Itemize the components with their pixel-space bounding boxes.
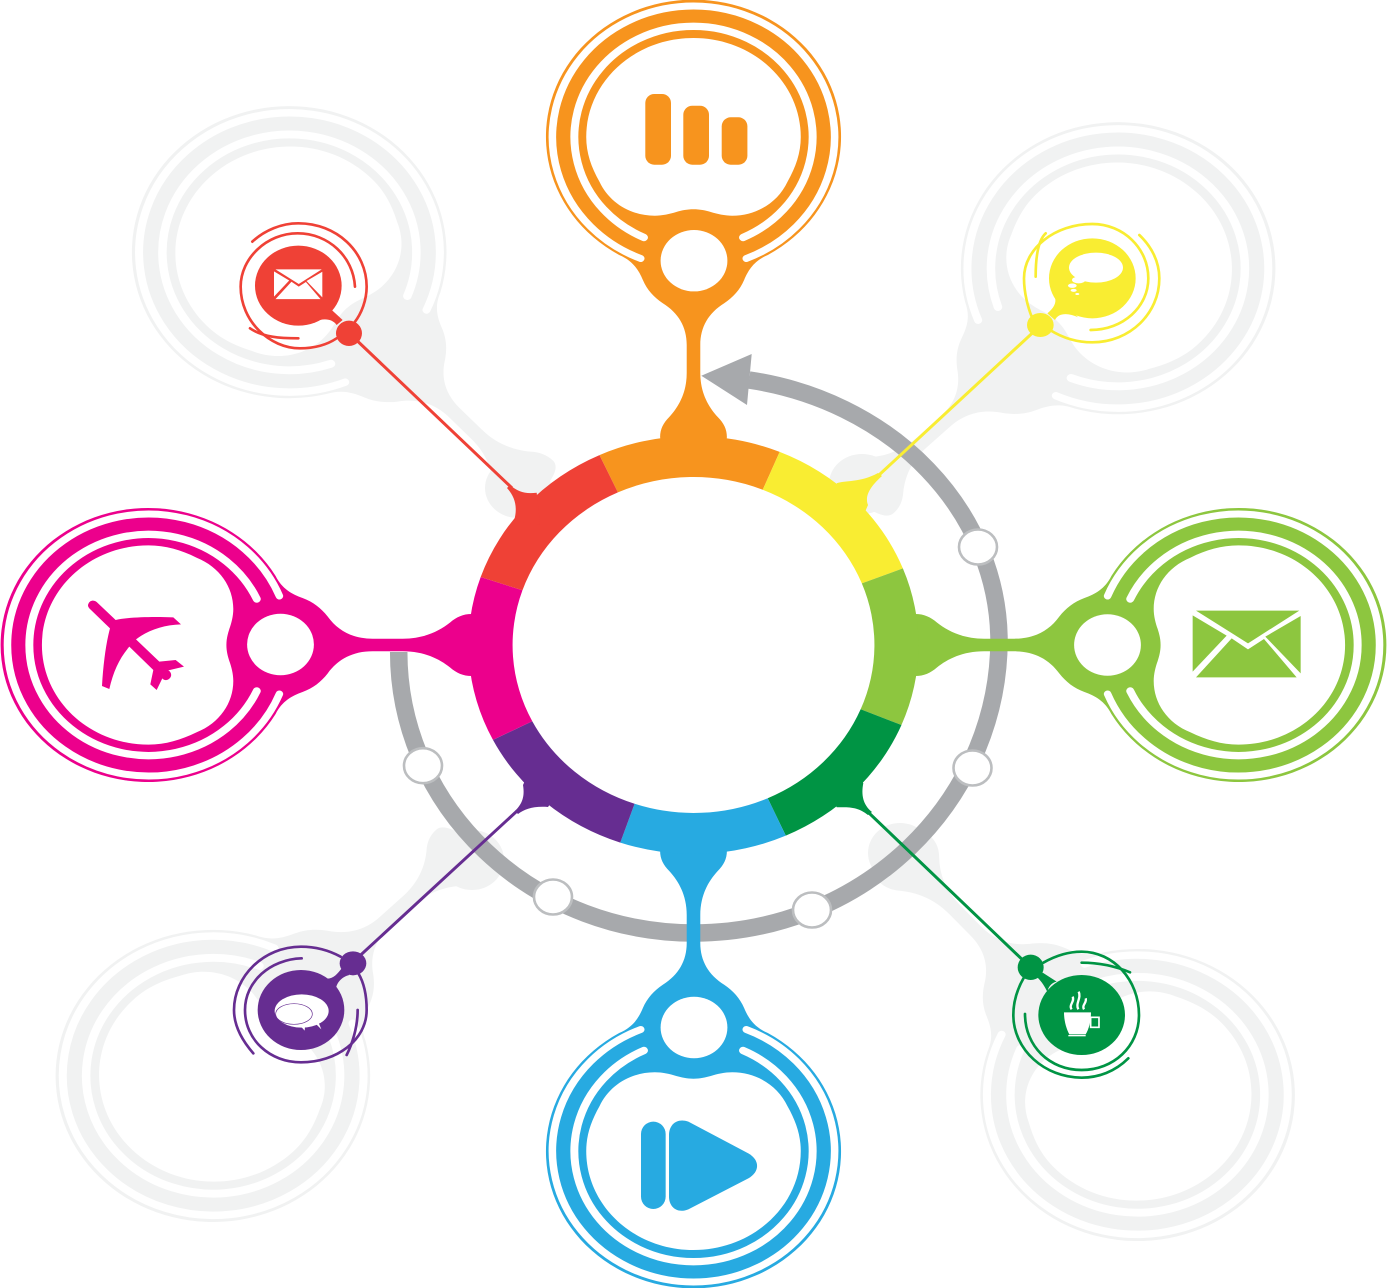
small bubble: purple conversation [234,770,560,1062]
ghost foot blobs [440,454,932,890]
ring segment: light green [861,568,919,725]
icon group: yellow chat bubble [1024,224,1159,342]
connector: purple [352,770,560,963]
icon: speech bubble [1068,253,1123,295]
icon group: purple conversation bubble [234,947,367,1062]
connector: red [349,333,540,525]
balloon: green envelope [901,508,1386,782]
ring segment: magenta [468,577,532,740]
balloon: magenta airplane [1,508,486,782]
icon: coffee cup [1064,992,1099,1036]
ghost balloon: upper left [67,46,652,595]
icon: conversation [275,994,329,1031]
ghost balloon: lower left [0,738,581,1282]
connector: dark green [830,770,1030,967]
ring segment: orange [599,436,780,492]
arrow nodes [404,530,997,928]
icon: bar chart [645,94,747,165]
icon group: green coffee bubble [1013,952,1139,1078]
small bubble: green coffee [830,770,1139,1078]
small bubble: red mail [241,223,540,525]
ring segment: purple [493,721,635,843]
icon: envelope [274,269,322,299]
balloon: orange bar chart [546,0,841,450]
small bubble: yellow chat [837,224,1159,512]
icon group: red mail bubble [241,223,367,348]
gray cycle arrow [399,354,999,933]
ring segment: red [481,455,618,590]
balloon: blue play [546,838,841,1288]
ghost balloon: upper right [749,62,1341,605]
color ring [468,436,919,854]
icon: play [641,1121,757,1211]
ring segment: yellow [763,452,903,583]
ring segment: dark green [768,709,901,836]
icon: envelope [1193,611,1301,677]
ghost balloon: lower right [778,750,1360,1288]
ring segment: blue [620,798,786,854]
icon: airplane [88,601,184,690]
connector: yellow [837,325,1041,512]
